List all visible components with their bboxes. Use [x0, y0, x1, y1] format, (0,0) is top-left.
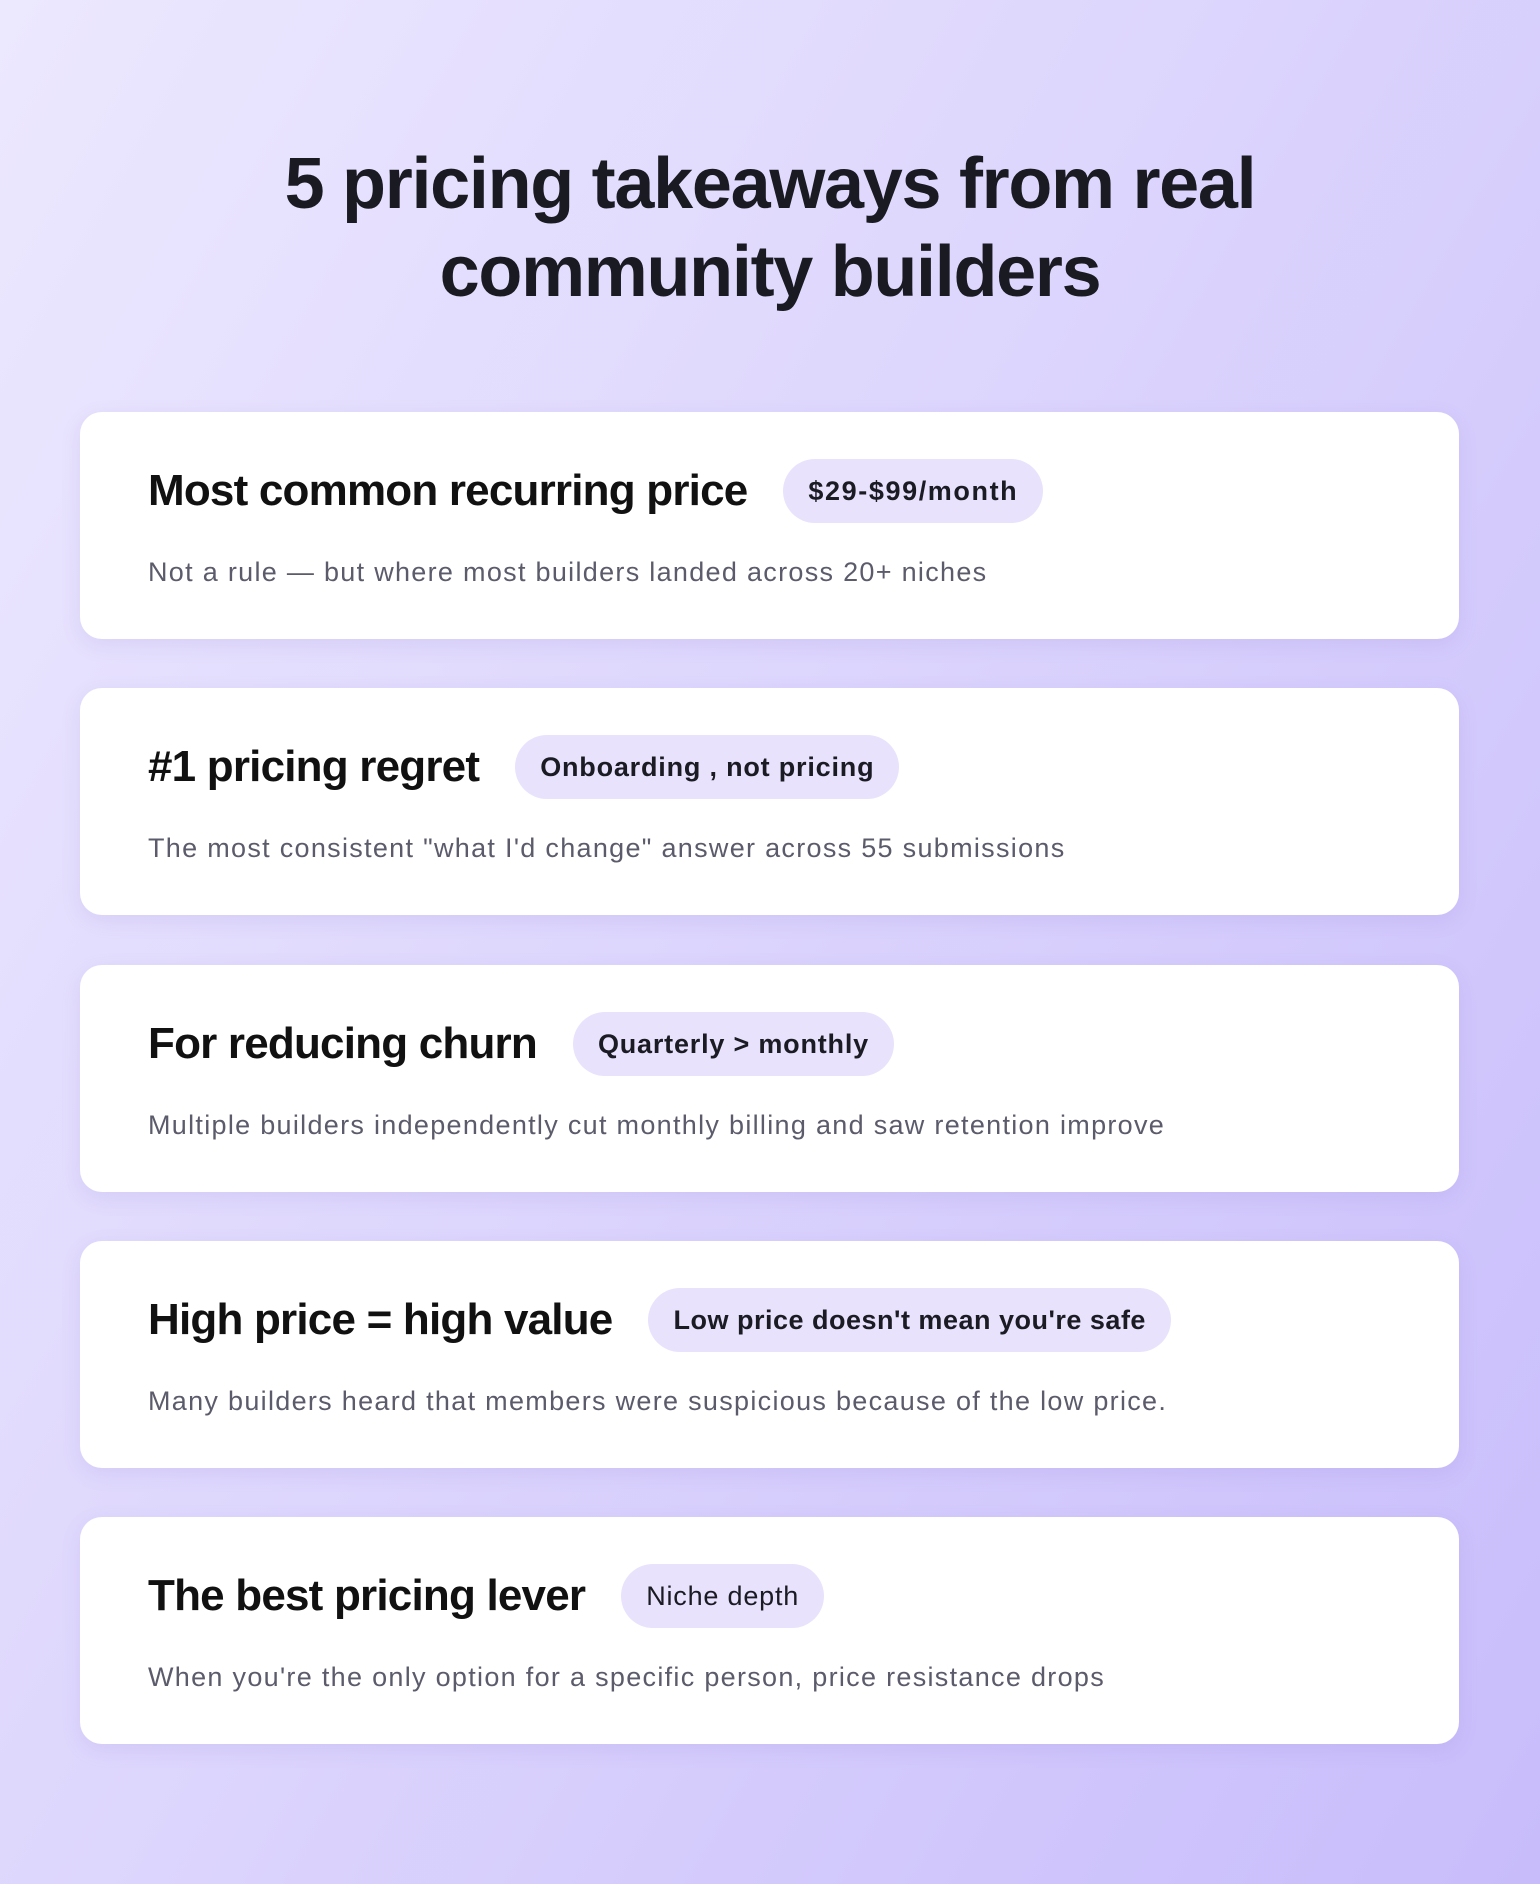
description: The most consistent "what I'd change" answer across 55 submissions [148, 833, 1066, 863]
heading row: #1 pricing regret [148, 742, 479, 791]
heading row [148, 1012, 894, 1076]
title: community builders [440, 232, 1100, 312]
heading row: Quarterly > monthly [598, 1028, 869, 1058]
description: When you're the only option for a specific person, price resistance drops [148, 1662, 1105, 1692]
heading row: For reducing churn [148, 1019, 537, 1068]
card: high price [80, 1241, 1459, 1468]
heading row: Most common recurring price [148, 466, 747, 515]
description: Many builders heard that members were suspicious because of the low price. [148, 1386, 1167, 1416]
heading row [148, 1564, 824, 1628]
heading row [148, 1288, 1171, 1352]
title: 5 pricing takeaways from real [285, 144, 1255, 224]
heading row: The best pricing lever [148, 1571, 585, 1620]
heading row: Niche depth [646, 1580, 799, 1610]
heading row [148, 735, 899, 799]
heading row: High price = high value [148, 1295, 612, 1344]
description: Not a rule — but where most builders landed across 20+ niches [148, 557, 987, 587]
heading row: $29-$99/month [808, 476, 1018, 506]
title [285, 144, 1255, 312]
heading row: Onboarding , not pricing [540, 752, 874, 782]
card: pricing regret [80, 688, 1459, 915]
card: reducing churn [80, 965, 1459, 1192]
card: most common recurring price [80, 412, 1459, 639]
card: best pricing lever [80, 1517, 1459, 1744]
heading row [148, 459, 1043, 523]
description: Multiple builders independently cut monthly billing and saw retention improve [148, 1110, 1165, 1140]
heading row: Low price doesn't mean you're safe [673, 1304, 1146, 1334]
